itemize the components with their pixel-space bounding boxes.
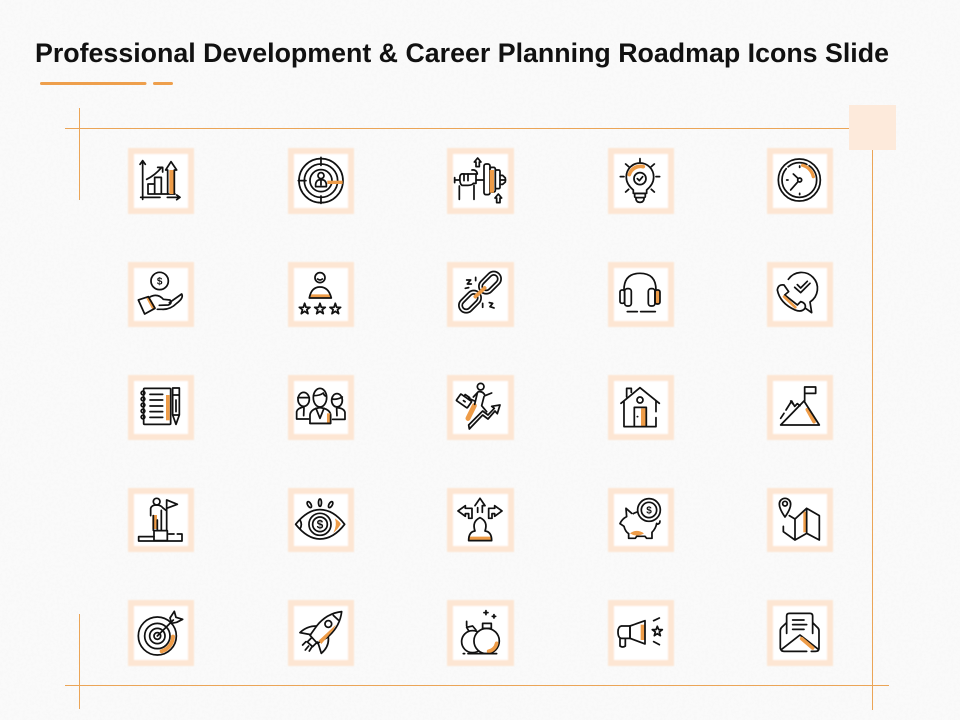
icon: broken chain link — [456, 269, 504, 316]
frame lines — [65, 108, 889, 710]
icon: team — [297, 388, 345, 423]
tile: piggy bank — [611, 491, 671, 549]
icon: mountain summit flag — [781, 387, 819, 425]
tile: money vision eye — [291, 491, 351, 549]
icon: support call check — [777, 272, 817, 313]
icon: growth chart — [140, 161, 180, 200]
icon: radar target — [298, 157, 343, 203]
icon: bombs — [462, 611, 499, 654]
tile: idea light bulb — [611, 151, 671, 211]
title underline accent — [40, 82, 173, 85]
tile: broken chain link — [450, 265, 511, 324]
tile: headset — [611, 265, 671, 324]
icon: piggy bank: $ — [646, 506, 652, 517]
icon: star rated person — [299, 273, 341, 314]
icon: notebook and pencil — [141, 388, 179, 424]
icon: strength barbell — [455, 158, 506, 203]
corner accent square — [849, 105, 896, 150]
icon: career direction arrows — [458, 498, 502, 541]
icon: clock — [778, 159, 820, 201]
tile: strength barbell — [450, 151, 511, 211]
tile: house — [611, 378, 671, 437]
icon: rocket — [300, 612, 342, 653]
icon: climbing businessperson — [456, 383, 500, 429]
tile: megaphone — [611, 603, 671, 663]
icon: hand holding coin: $ — [157, 277, 163, 288]
icon: megaphone — [618, 618, 662, 647]
tile: person with flag on podium — [131, 491, 191, 549]
tile: bombs — [450, 603, 511, 663]
tile: bullseye target — [131, 603, 191, 663]
tile: team — [291, 378, 351, 437]
tile: envelope letter — [770, 603, 830, 663]
tile: climbing businessperson — [450, 378, 511, 437]
tile: career direction arrows — [450, 491, 511, 549]
icon: person with flag on podium — [139, 498, 182, 541]
icon: headset — [620, 273, 660, 312]
title: Professional Development & Career Planning Roadmap Icons Slide — [35, 38, 889, 68]
icon: bullseye target — [138, 611, 183, 655]
tile: hand holding coin — [131, 265, 191, 324]
tile: rocket — [291, 603, 351, 663]
tile: radar target — [291, 151, 351, 211]
icon: map and pin — [779, 498, 819, 540]
tile: support call check — [770, 265, 830, 324]
tile: star rated person — [291, 265, 351, 324]
tile: notebook and pencil — [131, 378, 191, 437]
tile: map and pin — [770, 491, 830, 549]
icon: house — [621, 388, 659, 427]
tile: growth chart — [131, 151, 191, 211]
icon: envelope letter — [780, 613, 819, 651]
icon: idea light bulb — [620, 159, 660, 202]
tile: clock — [770, 151, 830, 211]
tile: mountain summit flag — [770, 378, 830, 437]
icon: money vision eye: $ — [317, 518, 324, 532]
